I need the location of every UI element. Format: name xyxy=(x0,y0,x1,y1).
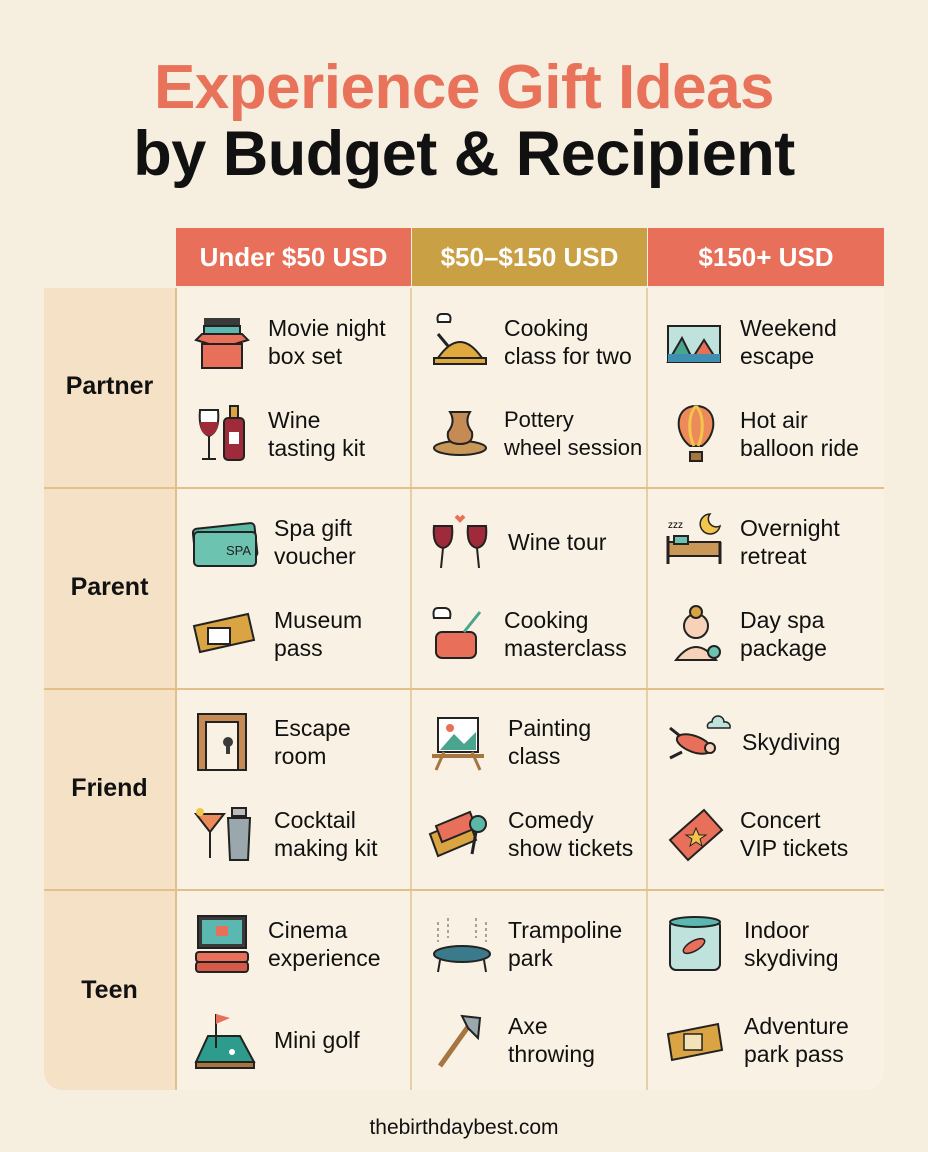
row label: Partner: Partner xyxy=(66,372,153,400)
item: skydiving xyxy=(669,715,840,760)
header: under $50: Under $50 USD xyxy=(200,242,387,272)
item: cocktail kit: making kit xyxy=(274,835,378,861)
item: pottery: wheel session xyxy=(504,435,642,460)
item: comedy show xyxy=(428,807,633,861)
item: museum pass: Museum xyxy=(274,607,362,633)
item: wine kit: tasting kit xyxy=(268,435,365,461)
item: concert VIP xyxy=(668,807,848,862)
item: hot air balloon: balloon ride xyxy=(740,435,859,461)
header: $50-$150: $50–$150 USD xyxy=(441,242,618,272)
item: museum pass xyxy=(192,607,362,661)
item: cooking class for two: class for two xyxy=(504,343,632,369)
item: cooking class for two: Cooking xyxy=(504,315,588,341)
item: cooking class for two xyxy=(433,313,632,369)
item: wine tour xyxy=(432,514,606,568)
header: $50-$150 xyxy=(412,228,647,286)
item: hot air balloon xyxy=(678,405,859,462)
header: $150+: $150+ USD xyxy=(698,242,834,272)
item: adventure park pass: Adventure xyxy=(744,1013,849,1039)
table panel xyxy=(44,288,884,1090)
item: indoor skydiving: Indoor xyxy=(744,917,809,943)
item: cooking masterclass xyxy=(432,607,627,661)
item: spa voucher: voucher xyxy=(274,543,356,569)
item: day spa package xyxy=(674,605,827,661)
item: trampoline xyxy=(433,917,622,972)
item: overnight retreat xyxy=(666,513,840,569)
item: movie night xyxy=(194,315,386,369)
item: escape room xyxy=(197,713,351,771)
item: axe throwing xyxy=(438,1013,595,1068)
item: movie night: box set xyxy=(268,343,342,369)
item: concert VIP: VIP tickets xyxy=(740,835,848,861)
item: cinema xyxy=(195,915,381,973)
item: indoor skydiving xyxy=(669,916,839,971)
item: pottery xyxy=(433,407,642,460)
item: comedy show: show tickets xyxy=(508,835,633,861)
row label: Parent: Parent xyxy=(71,573,148,601)
item: overnight retreat: zzz xyxy=(668,520,683,531)
item: cinema: experience xyxy=(268,945,381,971)
item: weekend escape: Weekend xyxy=(740,315,837,341)
item: pottery: Pottery xyxy=(504,407,574,432)
row label: Friend: Friend xyxy=(71,774,148,802)
item: escape room: Escape xyxy=(274,715,351,741)
item: trampoline: Trampoline xyxy=(508,917,622,943)
item: axe throwing: throwing xyxy=(508,1041,595,1067)
item: indoor skydiving: skydiving xyxy=(744,945,839,971)
header: under $50 xyxy=(176,228,411,286)
item: museum pass: pass xyxy=(274,635,323,661)
item: cocktail kit: Cocktail xyxy=(274,807,356,833)
item: spa voucher xyxy=(192,515,356,569)
item: painting class: class xyxy=(508,743,560,769)
item: mini golf xyxy=(194,1014,360,1069)
item: day spa package: package xyxy=(740,635,827,661)
item: wine kit xyxy=(198,405,365,461)
footer: thebirthdaybest.com xyxy=(369,1116,559,1139)
item: day spa package: Day spa xyxy=(740,607,824,633)
subtitle: by Budget & Recipient xyxy=(133,119,795,189)
item: wine tour: Wine tour xyxy=(508,529,606,555)
item: skydiving: Skydiving xyxy=(742,729,840,755)
item: weekend escape xyxy=(666,315,837,369)
item: cooking masterclass: masterclass xyxy=(504,635,627,661)
item: escape room: room xyxy=(274,743,326,769)
item: spa voucher: SPA xyxy=(226,543,251,558)
item: movie night: Movie night xyxy=(268,315,386,341)
item: spa voucher: Spa gift xyxy=(274,515,352,541)
item: cinema: Cinema xyxy=(268,917,347,943)
item: adventure park pass: park pass xyxy=(744,1041,844,1067)
item: mini golf: Mini golf xyxy=(274,1027,360,1053)
item: axe throwing: Axe xyxy=(508,1013,548,1039)
row label: Teen: Teen xyxy=(81,976,138,1004)
item: weekend escape: escape xyxy=(740,343,814,369)
item: concert VIP: Concert xyxy=(740,807,821,833)
title: Experience Gift Ideas xyxy=(154,53,774,122)
item: painting class xyxy=(432,715,591,771)
header: $150+ xyxy=(648,228,884,286)
item: overnight retreat: Overnight xyxy=(740,515,840,541)
item: painting class: Painting xyxy=(508,715,591,741)
item: comedy show: Comedy xyxy=(508,807,594,833)
item: adventure park pass xyxy=(666,1013,849,1067)
item: hot air balloon: Hot air xyxy=(740,407,808,433)
item: wine kit: Wine xyxy=(268,407,320,433)
item: cooking masterclass: Cooking xyxy=(504,607,588,633)
item: overnight retreat: retreat xyxy=(740,543,806,569)
item: cocktail kit xyxy=(194,807,378,861)
item: trampoline: park xyxy=(508,945,553,971)
